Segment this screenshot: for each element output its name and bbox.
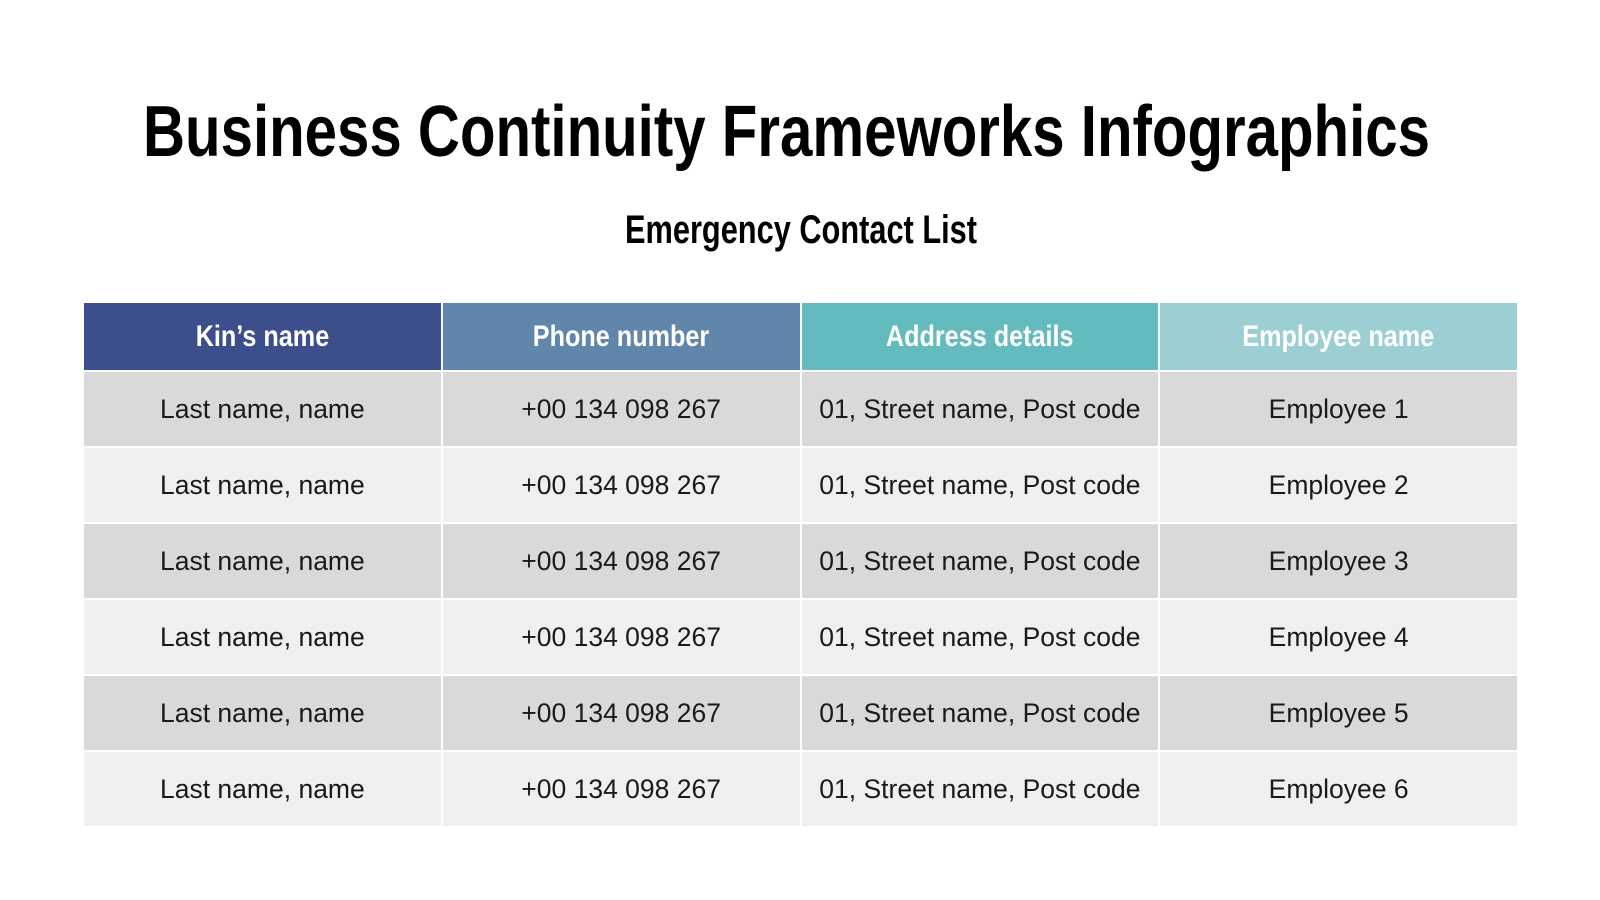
table: emergency contacts: Last name, name — [160, 394, 365, 424]
table: emergency contacts: +00 134 098 267 — [521, 470, 721, 500]
table: emergency contacts: +00 134 098 267 — [521, 622, 721, 652]
table: emergency contacts: Employee 4 — [1269, 622, 1409, 652]
table: emergency contacts: 01, Street name, Post code — [819, 698, 1140, 728]
table: emergency contacts: Employee 6 — [1269, 774, 1409, 804]
table: emergency contacts: +00 134 098 267 — [521, 698, 721, 728]
table: emergency contacts: Address details — [886, 320, 1074, 352]
table: emergency contacts: Last name, name — [160, 622, 365, 652]
table: emergency contacts: +00 134 098 267 — [521, 394, 721, 424]
table: emergency contacts: Last name, name — [160, 470, 365, 500]
table: emergency contacts: Employee 1 — [1269, 394, 1409, 424]
table: emergency contacts: +00 134 098 267 — [521, 546, 721, 576]
table: emergency contacts: 01, Street name, Post code — [819, 394, 1140, 424]
title — [143, 92, 1430, 252]
table: emergency contacts: Last name, name — [160, 546, 365, 576]
table: emergency contacts: 01, Street name, Post code — [819, 546, 1140, 576]
table: emergency contacts: 01, Street name, Post code — [819, 774, 1140, 804]
table: emergency contacts: Employee 2 — [1269, 470, 1409, 500]
table: emergency contacts: +00 134 098 267 — [521, 774, 721, 804]
title: Emergency Contact List — [625, 208, 977, 252]
table: emergency contacts: Last name, name — [160, 774, 365, 804]
table: emergency contacts: Kin’s name — [196, 320, 329, 352]
table: emergency contacts — [84, 303, 1517, 826]
table: emergency contacts: Employee name — [1243, 320, 1435, 352]
table: emergency contacts: Employee 3 — [1269, 546, 1409, 576]
table: emergency contacts: Employee 5 — [1269, 698, 1409, 728]
table: emergency contacts: Last name, name — [160, 698, 365, 728]
table: emergency contacts: 01, Street name, Post code — [819, 470, 1140, 500]
table: emergency contacts: 01, Street name, Post code — [819, 622, 1140, 652]
table: emergency contacts: Phone number — [533, 320, 709, 352]
